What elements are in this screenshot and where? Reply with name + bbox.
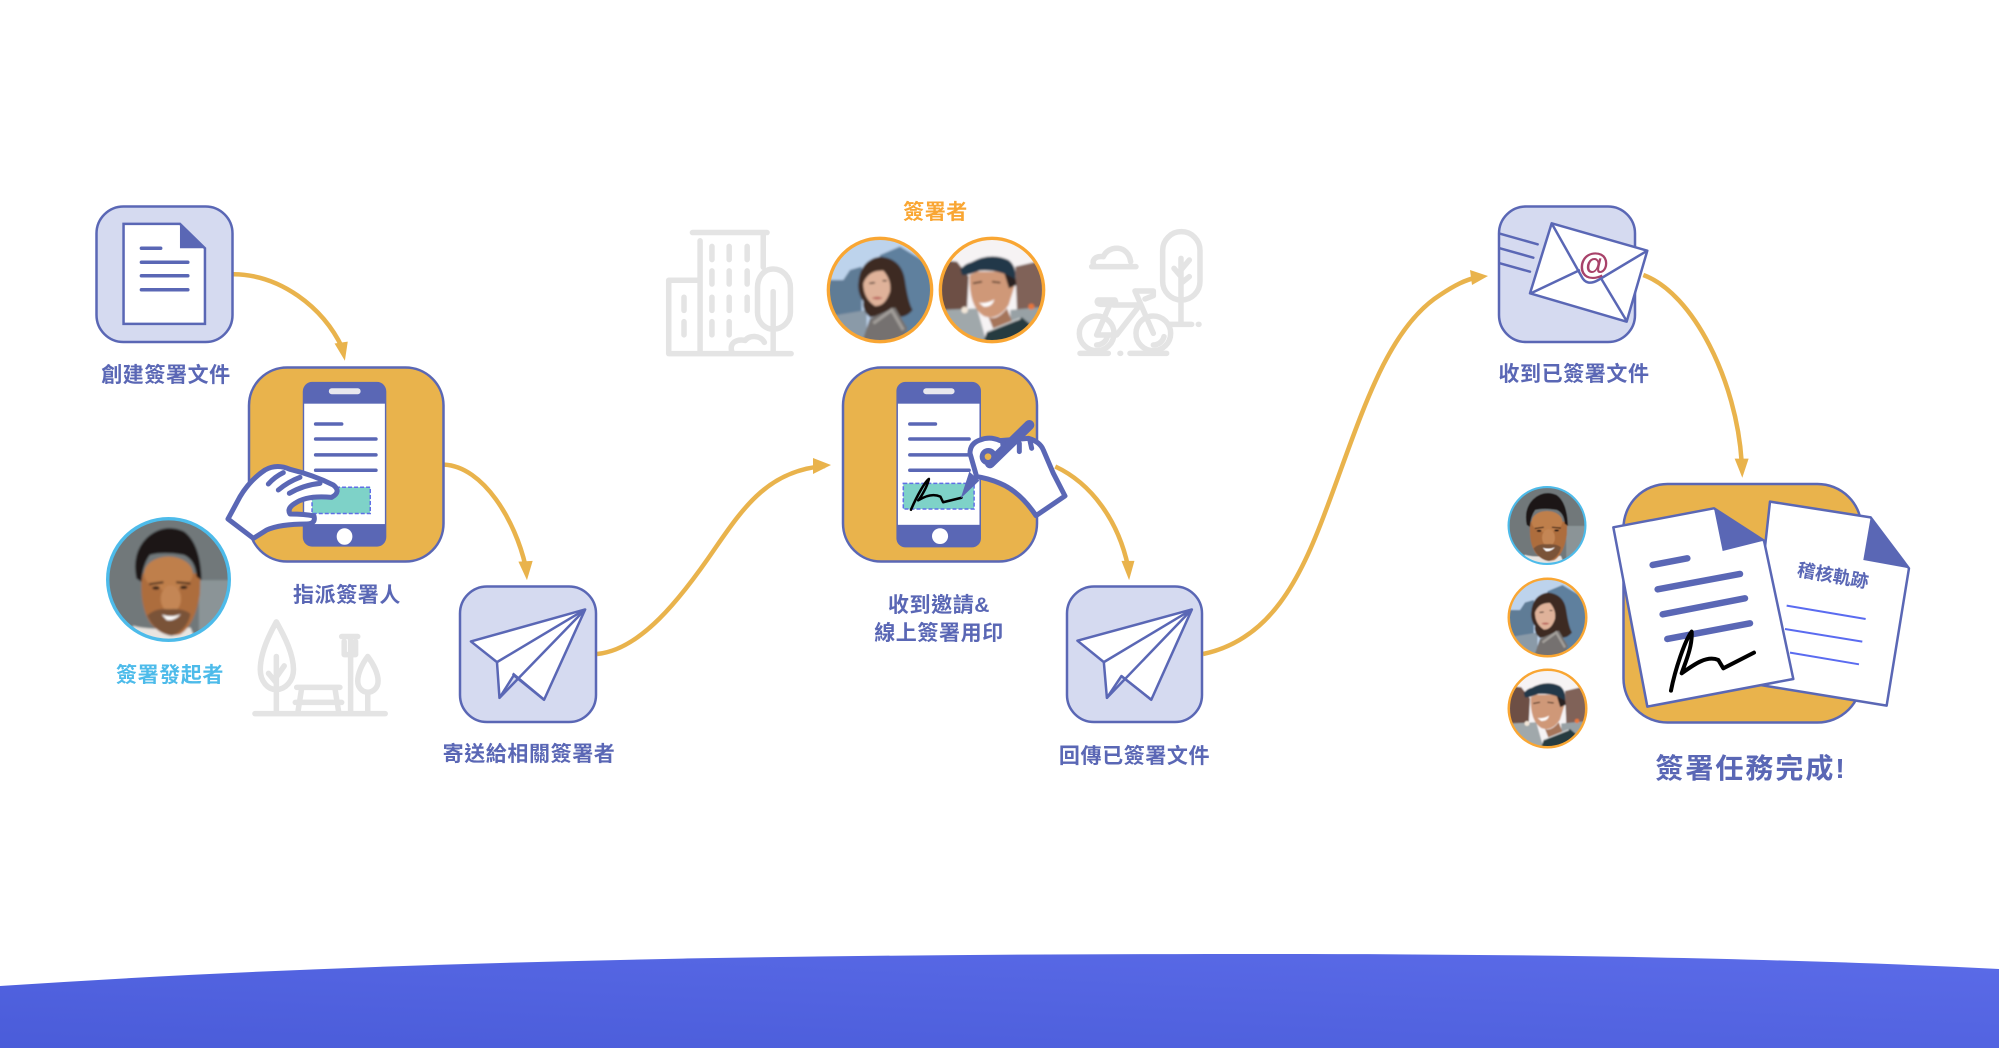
icon: document bbox=[124, 224, 205, 324]
label: receive invitation and sign: 收到邀請& bbox=[888, 594, 990, 617]
panel: task complete bbox=[1613, 484, 1909, 722]
portrait: man signer small bbox=[1506, 664, 1591, 754]
label: create document: 創建簽署文件 bbox=[101, 363, 231, 387]
arrow: signer to return bbox=[1055, 467, 1134, 580]
panel: return signed document bbox=[1067, 586, 1202, 722]
label: task complete: 簽署任務完成! bbox=[1655, 753, 1847, 784]
label: return signed document: 回傳已簽署文件 bbox=[1059, 744, 1210, 768]
panel: received signed document bbox=[1499, 206, 1647, 342]
portrait: initiator bbox=[99, 509, 241, 651]
icon: phone bbox=[303, 382, 386, 547]
illustration: park bench bbox=[255, 622, 385, 714]
label: initiator: 簽署發起者 bbox=[116, 663, 224, 687]
icon: audit trail document: 稽核軌跡 bbox=[1796, 559, 1870, 592]
arrow: send to signer bbox=[597, 458, 831, 654]
illustration: bicycle and tree bbox=[1079, 232, 1200, 353]
icon: audit trail document bbox=[1750, 502, 1909, 706]
portrait: man signer bbox=[937, 230, 1050, 350]
arrow: received to complete bbox=[1643, 275, 1749, 478]
portrait: initiator small bbox=[1503, 481, 1593, 571]
icon: envelope bbox=[1500, 223, 1647, 322]
label: receive invitation and sign: 線上簽署用印 bbox=[874, 621, 1004, 645]
label: send to signers: 寄送給相關簽署者 bbox=[443, 742, 615, 766]
icon: paper plane bbox=[1077, 609, 1192, 700]
label: assign signers: 指派簽署人 bbox=[293, 583, 401, 607]
panel: assign signers bbox=[228, 368, 444, 562]
panel: receive invitation and sign bbox=[843, 368, 1065, 562]
arrow: document to assign bbox=[234, 274, 348, 361]
icon: hand holding pen bbox=[961, 425, 1065, 516]
icon: pointing hand bbox=[228, 466, 337, 538]
portrait: woman signer small bbox=[1502, 572, 1592, 662]
panel: create document bbox=[96, 206, 232, 342]
icon: at sign: @ bbox=[1579, 246, 1609, 281]
icon: signed document bbox=[1613, 508, 1793, 707]
label: receive invitation and sign bbox=[874, 594, 1004, 645]
portrait: woman signer bbox=[820, 230, 940, 350]
icon: phone with signature bbox=[896, 382, 981, 547]
panel: send to signers bbox=[460, 586, 596, 722]
arrow: assign to send bbox=[444, 465, 533, 580]
label: signers: 簽署者 bbox=[903, 200, 968, 224]
arrow: return to received bbox=[1203, 270, 1488, 654]
label: received signed document: 收到已簽署文件 bbox=[1498, 362, 1650, 386]
bottom wave band bbox=[0, 954, 1999, 1048]
icon: paper plane bbox=[471, 609, 585, 700]
illustration: city buildings bbox=[669, 233, 791, 354]
